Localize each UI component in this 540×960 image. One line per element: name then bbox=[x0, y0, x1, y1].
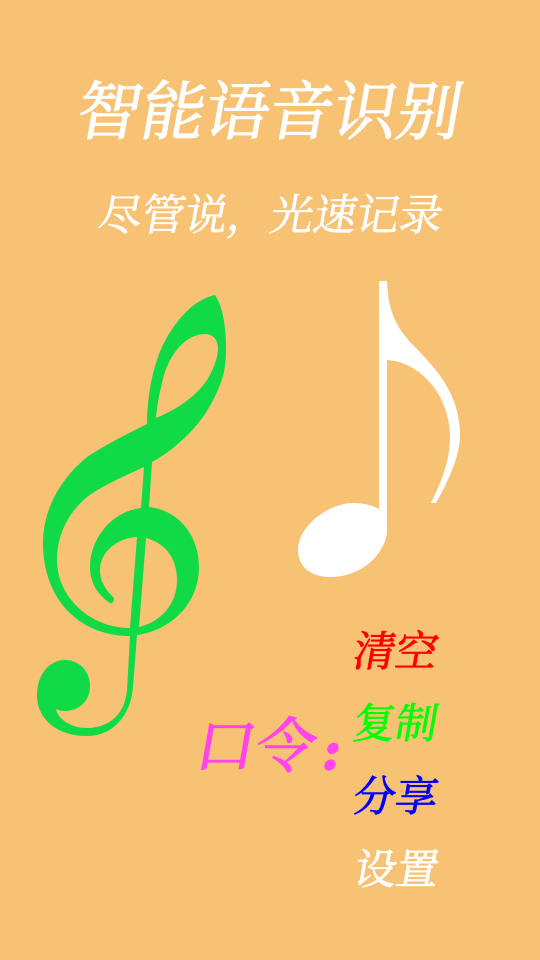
command: settings: 设置 bbox=[351, 848, 443, 894]
command: share: 分享 bbox=[350, 775, 442, 821]
command label: 口令: bbox=[190, 714, 345, 780]
title: 智能语音识别 bbox=[71, 77, 468, 148]
command: clear: 清空 bbox=[350, 630, 442, 676]
subtitle: 尽管说，光速记录 bbox=[95, 193, 447, 240]
command: copy: 复制 bbox=[350, 702, 442, 748]
